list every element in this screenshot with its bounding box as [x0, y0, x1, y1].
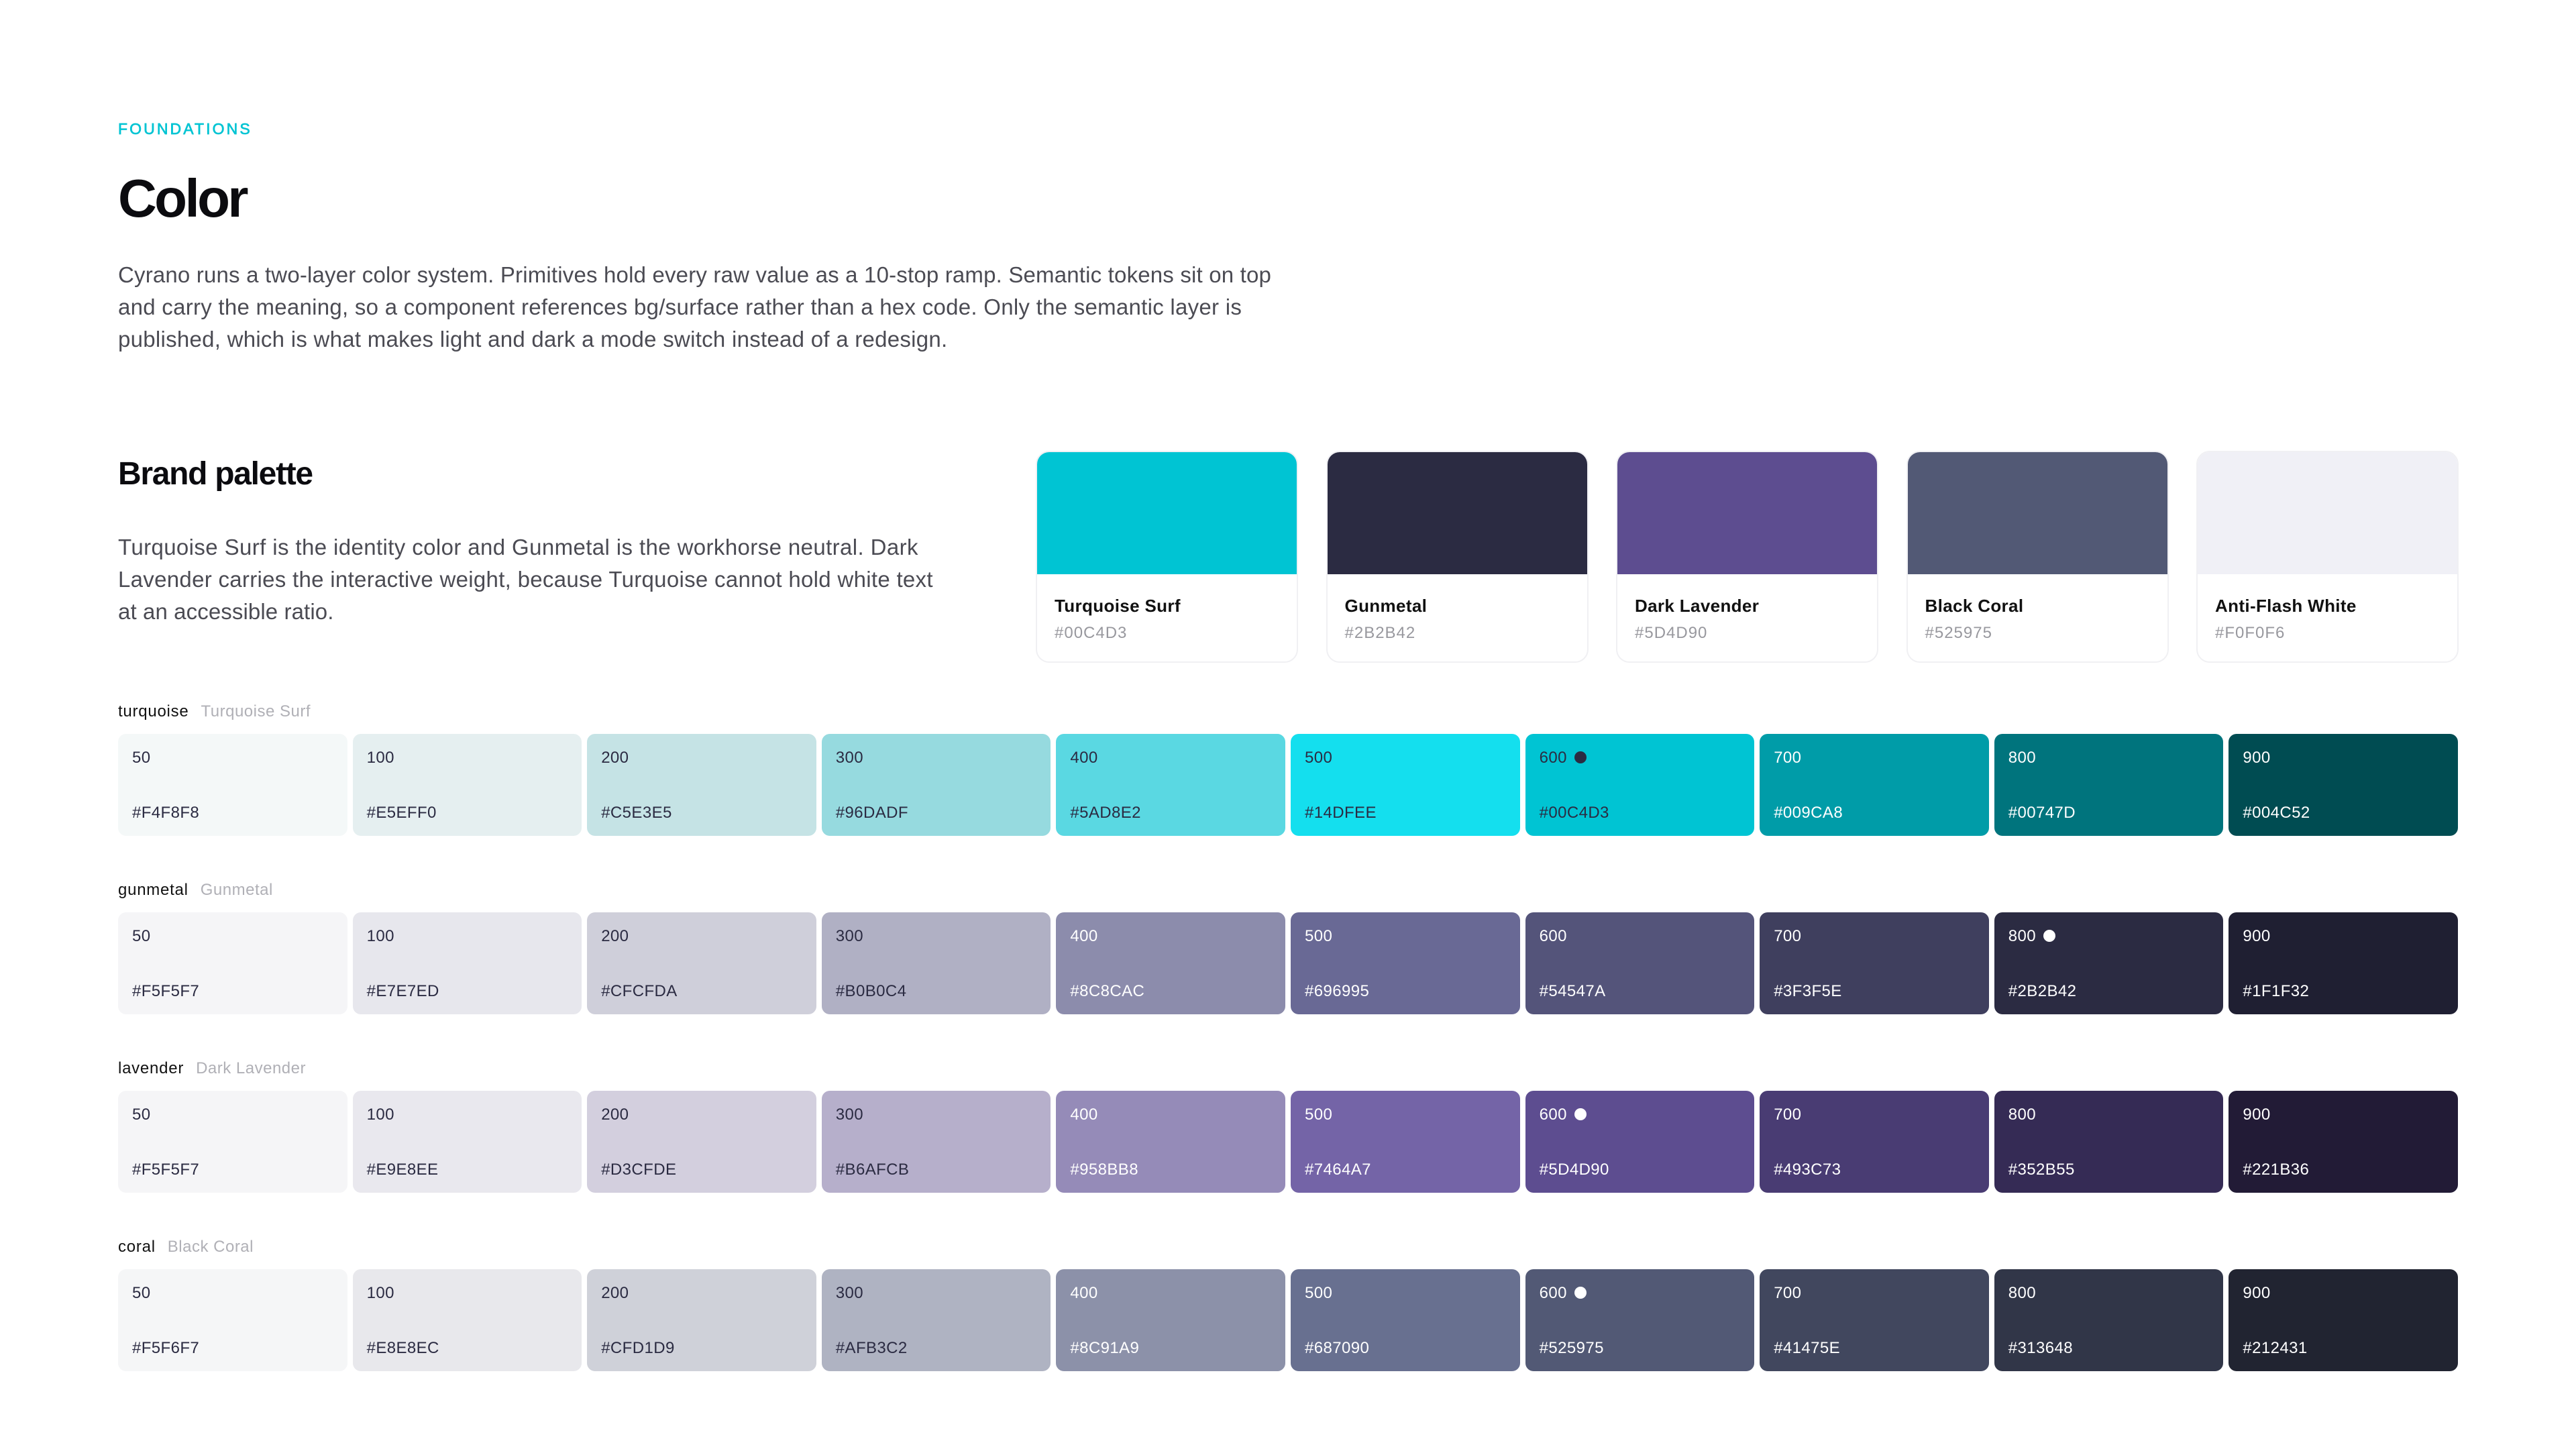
swatches: coral [118, 1269, 2458, 1371]
swatches: coral: #F5F6F7 [132, 1339, 199, 1357]
swatches: lavender: 300 [836, 1106, 863, 1124]
eyebrow: FOUNDATIONS: FOUNDATIONS [118, 120, 252, 138]
swatches: coral: #525975 [1540, 1339, 1604, 1357]
swatches: coral: #212431 [2243, 1339, 2308, 1357]
card: Gunmetal [1326, 451, 1589, 663]
swatches: turquoise [118, 734, 2458, 836]
swatches: gunmetal: #B0B0C4 [836, 982, 906, 1000]
card: Turquoise Surf: #00C4D3 [1055, 624, 1127, 642]
swatches: lavender: 200 [601, 1106, 629, 1124]
swatches: gunmetal [118, 912, 2458, 1014]
swatches: turquoise: #96DADF [836, 804, 908, 822]
card: Dark Lavender: Dark Lavender [1635, 596, 1759, 616]
swatches: lavender [118, 1091, 2458, 1193]
swatches: gunmetal: #54547A [1540, 982, 1606, 1000]
swatches: turquoise: 300 [836, 749, 863, 767]
swatches: gunmetal: 700 [1774, 927, 1801, 945]
swatches: coral: 600 [1540, 1284, 1567, 1302]
swatches: coral: 100 [367, 1284, 394, 1302]
swatches: turquoise: #F4F8F8 [132, 804, 199, 822]
card: Dark Lavender: #5D4D90 [1635, 624, 1707, 642]
swatches: coral: 50 [132, 1284, 150, 1302]
swatches: turquoise: 600 [1540, 749, 1567, 767]
swatches: lavender: #5D4D90 [1540, 1161, 1609, 1179]
swatches: coral: 300 [836, 1284, 863, 1302]
swatches: lavender: #958BB8 [1070, 1161, 1138, 1179]
swatches: coral: #E8E8EC [367, 1339, 439, 1357]
intro text: and carry the meaning, so a component references bg/surface rather than a hex code. Only the semantic layer is [118, 294, 1242, 319]
swatches: gunmetal: 300 [836, 927, 863, 945]
swatches: gunmetal: 200 [601, 927, 629, 945]
card: Anti-Flash White: Anti-Flash White [2215, 596, 2357, 616]
swatches: lavender: #B6AFCB [836, 1161, 909, 1179]
swatches: gunmetal: #1F1F32 [2243, 982, 2309, 1000]
swatches: gunmetal: 800 [2008, 927, 2036, 945]
intro text: published, which is what makes light and dark a mode switch instead of a redesign. [118, 327, 947, 352]
swatches: gunmetal: 50 [132, 927, 150, 945]
title: Color [118, 168, 246, 228]
swatches: coral: #AFB3C2 [836, 1339, 908, 1357]
swatches: lavender: #F5F5F7 [132, 1161, 199, 1179]
card: Black Coral: Black Coral [1925, 596, 2023, 616]
swatches: turquoise: #004C52 [2243, 804, 2310, 822]
card: Turquoise Surf [1036, 451, 1298, 663]
swatches: turquoise: #00C4D3 [1540, 804, 1609, 822]
intro text: Cyrano runs a two-layer color system. Primitives hold every raw value as a 10-stop ramp. Semantic tokens sit on top [118, 262, 1271, 287]
swatches: turquoise: 100 [367, 749, 394, 767]
ramp label: turquoise: turquoise Turquoise Surf [118, 702, 311, 720]
swatches: turquoise: #E5EFF0 [367, 804, 437, 822]
ramp: coral [118, 1238, 2458, 1371]
card: Dark Lavender [1616, 451, 1878, 663]
brand palette description: Lavender carries the interactive weight, because Turquoise cannot hold white text [118, 567, 933, 592]
swatches: coral: 500 [1305, 1284, 1332, 1302]
swatches: lavender: #221B36 [2243, 1161, 2309, 1179]
swatches: lavender: 50 [132, 1106, 150, 1124]
swatches: coral: #313648 [2008, 1339, 2073, 1357]
swatches: gunmetal: 100 [367, 927, 394, 945]
swatches: lavender: 600 [1540, 1106, 1567, 1124]
swatches: gunmetal: #696995 [1305, 982, 1369, 1000]
swatches: lavender: 400 [1070, 1106, 1098, 1124]
swatches: turquoise: #00747D [2008, 804, 2076, 822]
heading: Brand palette: Brand palette [118, 456, 313, 492]
swatches: coral: 900 [2243, 1284, 2271, 1302]
card: Gunmetal: Gunmetal [1344, 596, 1427, 616]
card: Black Coral [1907, 451, 2168, 663]
ramp label: lavender: lavender Dark Lavender [118, 1059, 306, 1077]
brand palette description: Turquoise Surf is the identity color and Gunmetal is the workhorse neutral. Dark [118, 535, 918, 559]
swatches: gunmetal: 900 [2243, 927, 2271, 945]
swatches: lavender: #E9E8EE [367, 1161, 438, 1179]
swatches: gunmetal: #8C8CAC [1070, 982, 1144, 1000]
card: Gunmetal: #2B2B42 [1344, 624, 1415, 642]
swatches: lavender: 700 [1774, 1106, 1801, 1124]
swatches: turquoise: #14DFEE [1305, 804, 1377, 822]
swatches: turquoise: 400 [1070, 749, 1098, 767]
ramp label: coral: coral Black Coral [118, 1238, 254, 1256]
swatches: turquoise: 900 [2243, 749, 2271, 767]
swatches: coral: #8C91A9 [1070, 1339, 1139, 1357]
swatches: gunmetal: 400 [1070, 927, 1098, 945]
swatches: coral: 400 [1070, 1284, 1098, 1302]
card: Black Coral: #525975 [1925, 624, 1992, 642]
swatches: gunmetal: #3F3F5E [1774, 982, 1842, 1000]
card: Turquoise Surf: Turquoise Surf [1055, 596, 1181, 616]
swatches: lavender: #7464A7 [1305, 1161, 1371, 1179]
intro text [118, 262, 1271, 352]
swatches: gunmetal: 600 [1540, 927, 1567, 945]
swatches: coral: 700 [1774, 1284, 1801, 1302]
swatches: lavender: 100 [367, 1106, 394, 1124]
swatches: coral: 200 [601, 1284, 629, 1302]
swatches: turquoise: 200 [601, 749, 629, 767]
brand palette description [118, 535, 933, 624]
ramp: gunmetal [118, 881, 2458, 1014]
swatches: turquoise: 500 [1305, 749, 1332, 767]
card: Anti-Flash White: #F0F0F6 [2215, 624, 2285, 642]
swatches: coral: #687090 [1305, 1339, 1369, 1357]
swatches: coral: #CFD1D9 [601, 1339, 675, 1357]
swatches: lavender: 900 [2243, 1106, 2271, 1124]
swatches: turquoise: #5AD8E2 [1070, 804, 1141, 822]
swatches: coral: #41475E [1774, 1339, 1840, 1357]
swatches: gunmetal: #E7E7ED [367, 982, 439, 1000]
swatches: gunmetal: #CFCFDA [601, 982, 678, 1000]
swatches: lavender: #493C73 [1774, 1161, 1841, 1179]
swatches: lavender: #352B55 [2008, 1161, 2075, 1179]
swatches: turquoise: 50 [132, 749, 150, 767]
swatches: lavender: #D3CFDE [601, 1161, 676, 1179]
swatches: coral: 800 [2008, 1284, 2036, 1302]
swatches: gunmetal: #F5F5F7 [132, 982, 199, 1000]
swatches: turquoise: #009CA8 [1774, 804, 1843, 822]
swatches: lavender: 500 [1305, 1106, 1332, 1124]
swatches: turquoise: #C5E3E5 [601, 804, 672, 822]
swatches: turquoise: 700 [1774, 749, 1801, 767]
swatches: gunmetal: 500 [1305, 927, 1332, 945]
swatches: turquoise: 800 [2008, 749, 2036, 767]
ramp: lavender [118, 1059, 2458, 1193]
ramp label: gunmetal: gunmetal Gunmetal [118, 881, 273, 899]
card: Anti-Flash White [2196, 451, 2459, 663]
swatches: gunmetal: #2B2B42 [2008, 982, 2076, 1000]
ramp: turquoise [118, 702, 2458, 836]
brand palette description: at an accessible ratio. [118, 599, 333, 624]
swatches: lavender: 800 [2008, 1106, 2036, 1124]
